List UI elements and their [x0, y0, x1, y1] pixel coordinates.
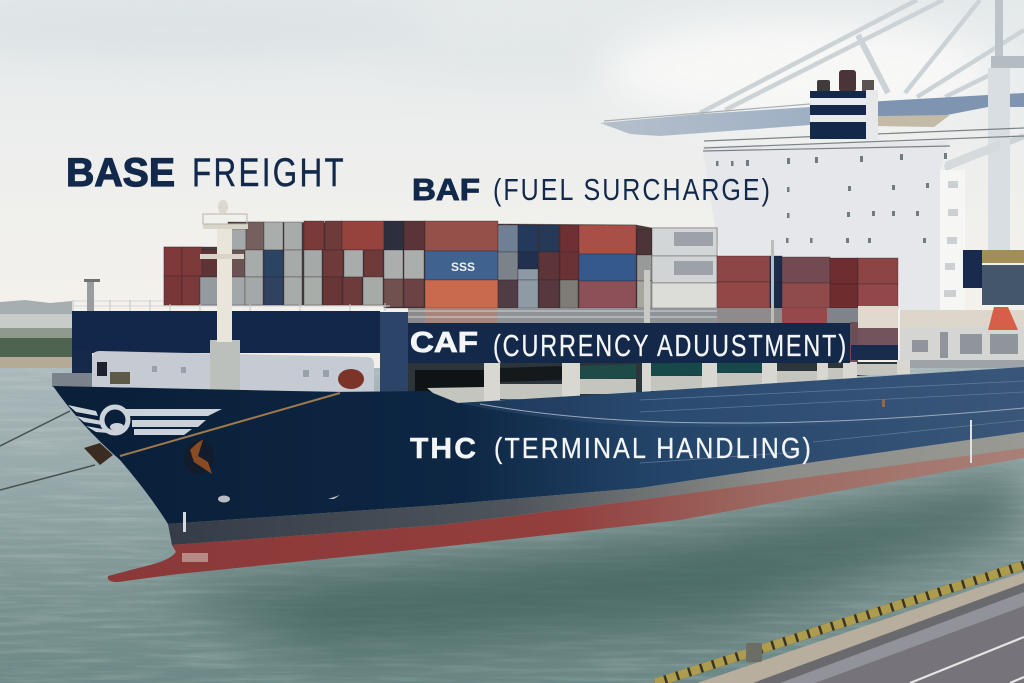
ship hull [53, 367, 1024, 582]
label: THC (TERMINAL HANDLING): THC [410, 433, 478, 465]
label: CAF (CURRENCY ADJUSTMENT) [410, 327, 848, 363]
SSS container logo: SSS [451, 260, 475, 274]
CAF label background banner [408, 323, 850, 363]
water [0, 368, 1024, 683]
label: BAF (FUEL SURCHARGE) [412, 172, 772, 207]
container stacks [164, 221, 898, 308]
white container vents [674, 232, 713, 275]
sky background [0, 0, 1024, 380]
label: BASE FREIGHT: FREIGHT [192, 151, 346, 195]
mooring ropes and fender [0, 393, 340, 490]
crane boom and lattice [600, 0, 1024, 250]
red anti-fouling hull bottom [108, 448, 1024, 582]
label: BAF (FUEL SURCHARGE): (FUEL SURCHARGE) [493, 172, 772, 207]
bow block: navy bulwark [52, 311, 408, 392]
boot-top grey band [168, 432, 1024, 545]
label: BAF (FUEL SURCHARGE): BAF [412, 172, 480, 207]
forward signal mast [84, 279, 100, 311]
right side port equipment [900, 250, 1024, 368]
ship superstructure: white accommodation block [702, 128, 1024, 312]
distant shoreline [0, 300, 72, 369]
label: CAF (CURRENCY ADJUSTMENT): (CURRENCY ADUUSTMENT) [493, 328, 848, 363]
dock quay with yellow fenders [655, 565, 1024, 683]
top container row [228, 221, 717, 256]
hull emblem [184, 440, 214, 474]
mast tower [200, 200, 248, 390]
lower container row [164, 276, 898, 308]
label: BASE FREIGHT: BASE [66, 151, 175, 195]
label: CAF (CURRENCY ADJUSTMENT): CAF [410, 327, 478, 359]
bow logo stripes [68, 405, 222, 435]
mid-ship cabin windows and pillars [408, 360, 910, 403]
middle container row [164, 247, 898, 284]
lighter upper hull plating [458, 367, 1024, 427]
label: BASE FREIGHT [66, 151, 346, 195]
funnel with navy and white stripes [810, 70, 878, 140]
stack backing [164, 222, 717, 308]
label: THC (TERMINAL HANDLING): (TERMINAL HANDLING) [494, 433, 813, 465]
deck railing [73, 240, 898, 362]
